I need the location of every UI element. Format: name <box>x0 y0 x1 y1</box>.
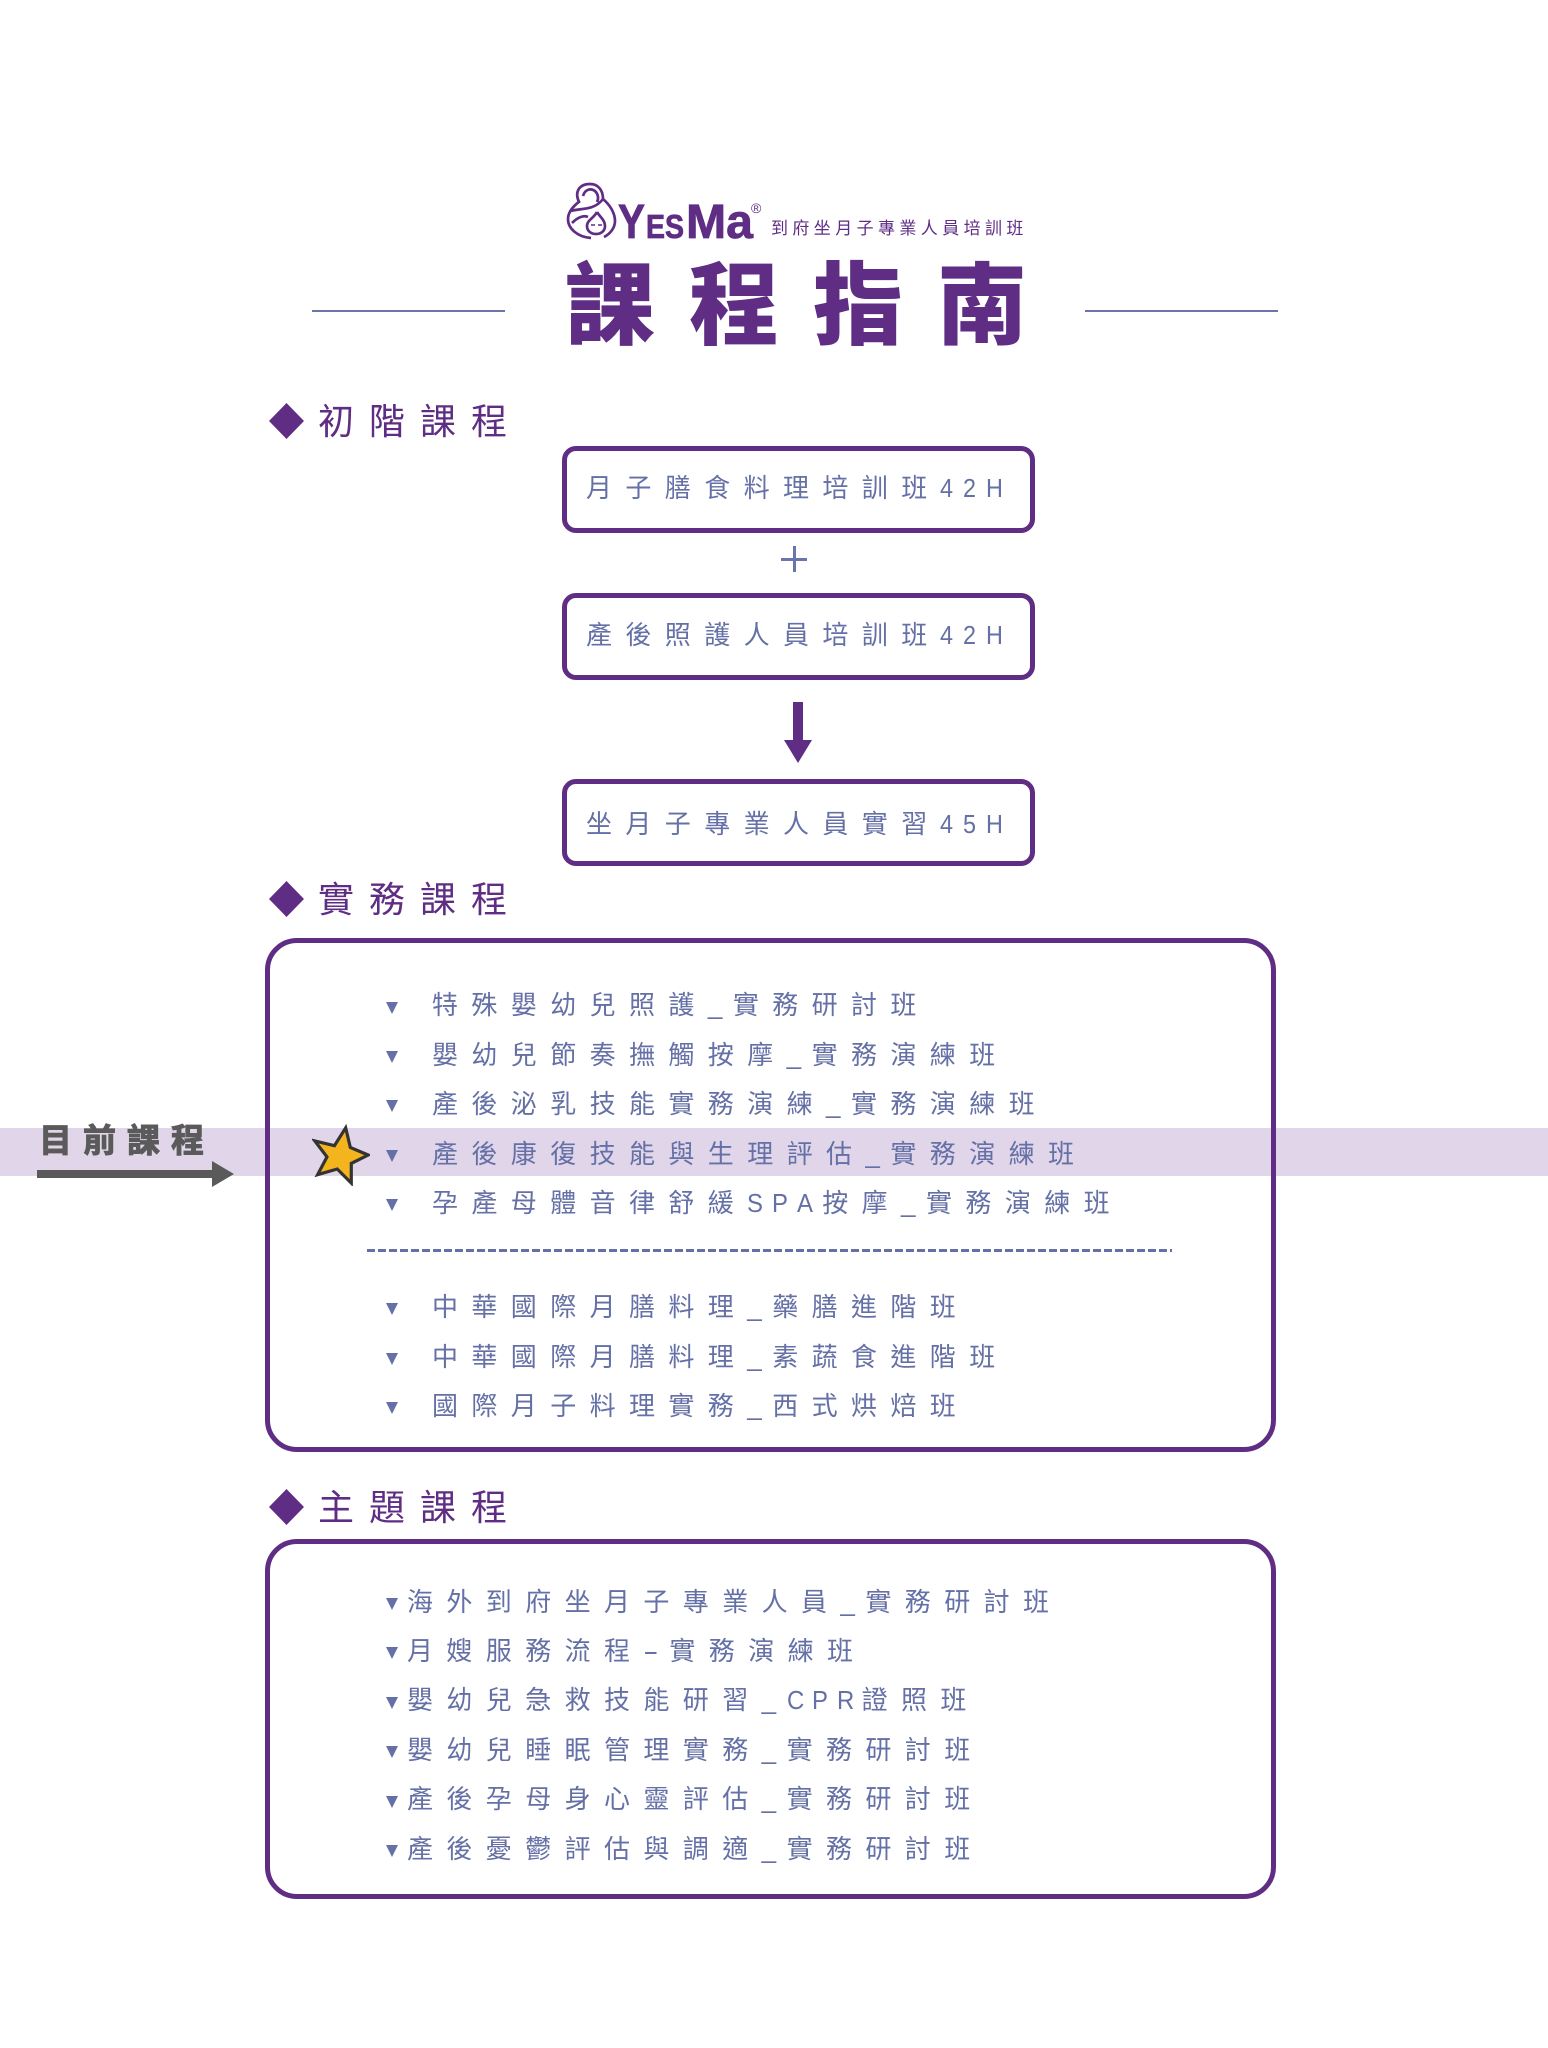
course row: _ <box>762 1784 776 1814</box>
arrow: down <box>784 702 812 763</box>
course row: 產後憂鬱評估與調適 實務研討班 <box>407 1834 984 1864</box>
box text: postpartum care course: H <box>986 620 1003 650</box>
current course label: 目前課程 <box>39 1122 215 1159</box>
course row: _ <box>762 1685 776 1715</box>
triangle bullet <box>386 1051 398 1063</box>
course row: P <box>772 1188 788 1218</box>
box: meal course <box>562 446 1035 533</box>
wordmark: ® <box>751 200 762 216</box>
course row: current: _ <box>865 1139 880 1169</box>
course row: current: 產後康復技能與生理評估 實務演練班 <box>432 1139 1087 1169</box>
panel: topic courses <box>265 1539 1276 1899</box>
box text: internship: 4 <box>940 809 953 839</box>
course row: - <box>643 1636 659 1666</box>
course row: _ <box>901 1188 915 1218</box>
box text: postpartum care course: 2 <box>963 620 976 650</box>
triangle bullet <box>386 1746 398 1758</box>
course row: _ <box>762 1735 776 1765</box>
box: internship <box>562 779 1035 866</box>
course row: _ <box>747 1342 762 1372</box>
course row: _ <box>787 1040 801 1070</box>
triangle bullet <box>386 1353 398 1365</box>
course row: C <box>787 1685 804 1715</box>
course row: 中華國際月膳料理 素蔬食進階班 <box>432 1342 1009 1372</box>
wordmark <box>618 196 762 249</box>
icon: mother and baby <box>568 184 615 238</box>
box text: meal course: 月子膳食料理培訓班 <box>586 473 941 503</box>
triangle bullet <box>386 1647 398 1659</box>
course row: 月嫂服務流程 實務演練班 <box>407 1636 866 1666</box>
plus sign <box>781 546 807 572</box>
panel: practical courses <box>265 938 1276 1452</box>
dashed divider <box>367 1249 1172 1252</box>
course row: 孕產母體音律舒緩 按摩 實務演練班 <box>432 1188 1123 1218</box>
course row: 特殊嬰幼兒照護 實務研討班 <box>432 990 930 1020</box>
course row: _ <box>826 1089 840 1119</box>
course row: 產後泌乳技能實務演練 實務演練班 <box>432 1089 1048 1119</box>
box text: internship: 坐月子專業人員實習 <box>586 809 941 839</box>
course row: 產後孕母身心靈評估 實務研討班 <box>407 1784 984 1814</box>
icon: section diamond 2 <box>269 881 304 917</box>
course row: _ <box>747 1391 762 1421</box>
course row: _ <box>708 990 722 1020</box>
course row: 海外到府坐月子專業人員 實務研討班 <box>407 1587 1062 1617</box>
box text: meal course: H <box>986 473 1003 503</box>
highlight band <box>0 1128 1548 1176</box>
course row: 中華國際月膳料理 藥膳進階班 <box>432 1292 969 1322</box>
box: postpartum care course <box>562 593 1035 680</box>
course row: R <box>837 1685 854 1715</box>
triangle bullet <box>386 1845 398 1857</box>
logo <box>566 182 1028 247</box>
course row: 嬰幼兒睡眠管理實務 實務研討班 <box>407 1735 984 1765</box>
title rule left <box>312 310 505 312</box>
arrow: current course <box>37 1161 234 1187</box>
triangle bullet <box>386 1199 398 1211</box>
course row: S <box>747 1188 763 1218</box>
course row: _ <box>747 1292 762 1322</box>
box text: meal course: 2 <box>963 473 976 503</box>
course row: 國際月子料理實務 西式烘焙班 <box>432 1391 969 1421</box>
heading: topic courses: 主題課程 <box>318 1487 522 1528</box>
title rule right <box>1085 310 1278 312</box>
triangle bullet <box>386 1598 398 1610</box>
box text: internship: H <box>986 809 1003 839</box>
icon: section diamond 1 <box>269 403 304 439</box>
course row: 嬰幼兒節奏撫觸按摩 實務演練班 <box>432 1040 1009 1070</box>
triangle bullet <box>386 1796 398 1808</box>
wordmark: ES <box>646 208 684 245</box>
heading: practical courses: 實務課程 <box>318 879 522 920</box>
triangle bullet <box>386 1100 398 1112</box>
box text: meal course: 4 <box>940 473 953 503</box>
course row: 嬰幼兒急救技能研習 證照班 <box>407 1685 980 1715</box>
icon: star <box>312 1124 370 1186</box>
course row: _ <box>840 1587 855 1617</box>
triangle bullet <box>386 1002 398 1014</box>
heading: beginner courses: 初階課程 <box>318 401 522 442</box>
title: 課程指南 <box>565 257 1061 357</box>
course row: _ <box>762 1834 776 1864</box>
box text: postpartum care course: 產後照護人員培訓班 <box>586 620 941 650</box>
triangle bullet <box>386 1150 398 1162</box>
triangle bullet <box>386 1303 398 1315</box>
triangle bullet <box>386 1402 398 1414</box>
course row: P <box>812 1685 828 1715</box>
box text: postpartum care course: 4 <box>940 620 953 650</box>
triangle bullet <box>386 1697 398 1709</box>
box text: internship: 5 <box>963 809 976 839</box>
course row: A <box>797 1188 813 1218</box>
icon: section diamond 3 <box>269 1489 304 1525</box>
logo subtitle: 到府坐月子專業人員培訓班 <box>771 219 1028 238</box>
